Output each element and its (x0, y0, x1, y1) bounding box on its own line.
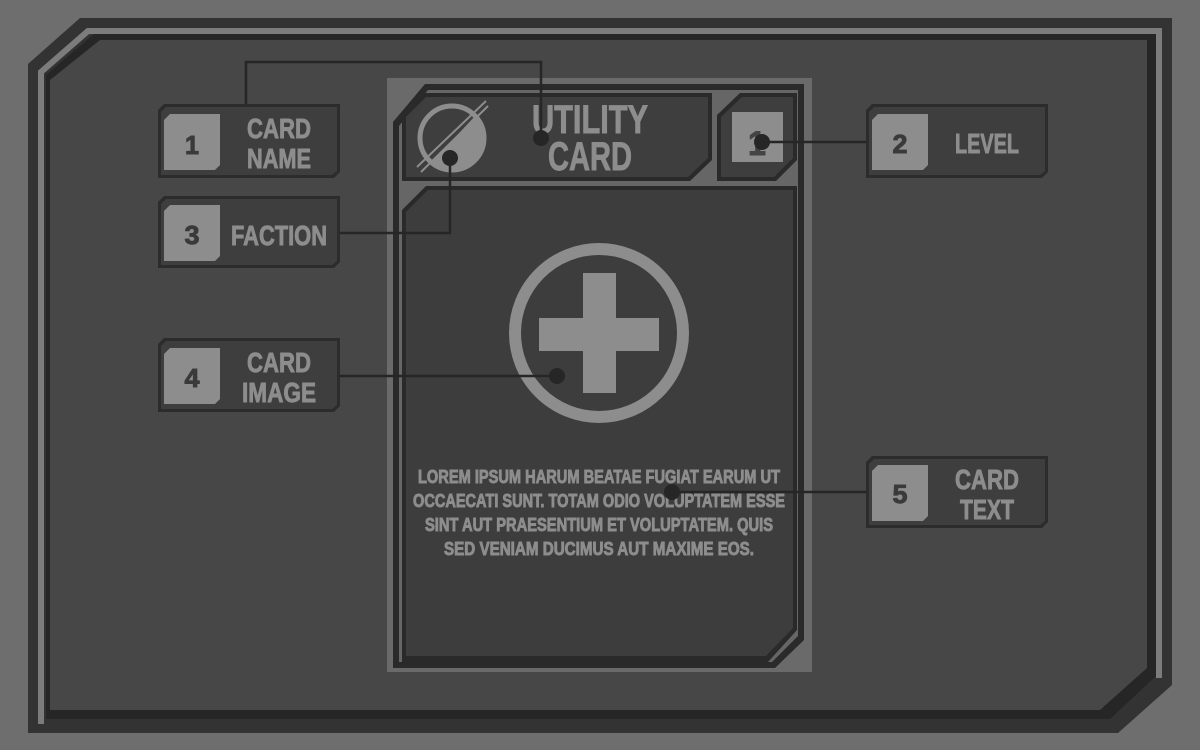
card text: SINT AUT PRAESENTIUM ET VOLUPTATEM. QUIS (425, 515, 773, 535)
callout 1: card name (158, 104, 340, 178)
callout 5: card text (866, 456, 1048, 528)
callout 5: card text: TEXT (960, 494, 1014, 525)
card text: SED VENIAM DUCIMUS AUT MAXIME EOS. (444, 539, 754, 559)
callout 2: level (866, 104, 1048, 178)
callout 5: card text: 5 (892, 479, 908, 509)
icon: medical cross (515, 249, 683, 417)
card text (413, 467, 785, 559)
card level box: 1 (748, 125, 766, 163)
callout 4: card image: IMAGE (242, 377, 316, 408)
callout 2: level: LEVEL (955, 128, 1019, 159)
callout 5: card text: CARD (955, 464, 1019, 495)
card title text: CARD (548, 135, 632, 179)
callout 3: faction (158, 196, 340, 268)
callout 1: card name: CARD (247, 113, 311, 144)
card title text (532, 98, 648, 179)
callout 4: card image: CARD (247, 347, 311, 378)
callout 3: faction: 3 (184, 220, 200, 250)
card title text: UTILITY (532, 98, 648, 142)
card (387, 78, 812, 672)
card text: LOREM IPSUM HARUM BEATAE FUGIAT EARUM UT (418, 467, 780, 487)
callout 4: card image (158, 338, 340, 412)
callout 4: card image: 4 (184, 363, 200, 393)
callout 3: faction: FACTION (231, 220, 327, 251)
card level box (717, 93, 797, 181)
callout 1: card name: 1 (185, 130, 199, 160)
callout 2: level: 2 (892, 129, 908, 159)
card header: name (402, 93, 712, 181)
card body (402, 186, 797, 662)
icon: faction (417, 101, 488, 172)
connector lines (246, 62, 866, 492)
callout 1: card name: NAME (247, 143, 311, 174)
connector dots (442, 130, 770, 500)
card text: OCCAECATI SUNT. TOTAM ODIO VOLUPTATEM ESSE (413, 491, 785, 511)
